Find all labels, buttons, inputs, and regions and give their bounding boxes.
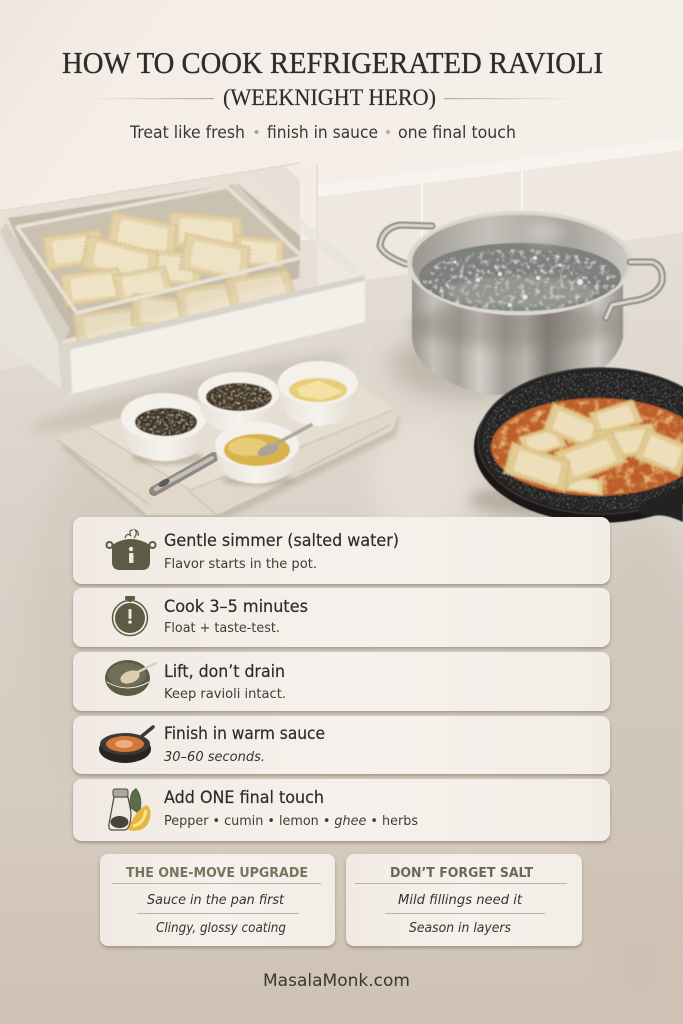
- step 1 text: Gentle simmer (salted water): [164, 531, 399, 550]
- tagline: finish in sauce: [267, 123, 378, 143]
- step 3 card: lift, don't drain: Keep ravioli intact.: [164, 686, 286, 702]
- spoon handle on napkin: [154, 457, 214, 491]
- step 2 text: Cook 3–5 minutes: [164, 597, 308, 616]
- footer: site name: MasalaMonk.com: [263, 971, 410, 991]
- step 4 card: finish in warm sauce: [73, 716, 610, 774]
- icon: stopwatch: [112, 596, 148, 636]
- upper cabinet: [0, 163, 318, 370]
- step 4 text: Finish in warm sauce: [164, 724, 325, 743]
- background: wall: [0, 0, 683, 300]
- step 3 card: lift, don't drain: [73, 652, 610, 711]
- skillet handle: [638, 486, 683, 522]
- tip panel: the one-move upgrade: Sauce in the pan first: [147, 892, 285, 908]
- tip panel: don't forget salt: Mild fillings need it: [398, 892, 523, 908]
- tomato sauce: [491, 398, 683, 496]
- ravioli in skillet: [502, 399, 683, 497]
- step 5 card: final touch: [73, 779, 610, 841]
- step 4 card: finish in warm sauce: 30–60 seconds.: [164, 749, 265, 765]
- ramekin: ghee with spoon: [215, 422, 311, 486]
- icon: skillet with sauce: [99, 727, 153, 763]
- background: marble counter: [0, 232, 683, 1024]
- icon: pot with steam: [106, 530, 156, 570]
- tip panel: don't forget salt: [346, 854, 582, 946]
- folded linen napkin: [57, 385, 400, 522]
- step 5 text: Add ONE final touch: [164, 788, 324, 807]
- step 3 text: Lift, don’t drain: [164, 662, 285, 681]
- ramekin: cracked pepper: [121, 393, 207, 465]
- tagline: one final touch: [398, 123, 516, 143]
- tip panel: the one-move upgrade: Clingy, glossy coating: [156, 920, 286, 936]
- ramekin: butter: [278, 361, 358, 426]
- subtitle with flanking rules: (WEEKNIGHT HERO): [223, 85, 436, 110]
- step 2 card: cook time: [73, 588, 610, 647]
- title: HOW TO COOK REFRIGERATED RAVIOLI: [62, 45, 603, 80]
- tip panel: the one-move upgrade: [100, 854, 335, 946]
- skillet with ravioli in sauce: [470, 368, 683, 523]
- tip panel: don't forget salt: DON’T FORGET SALT: [390, 865, 534, 881]
- tagline: [129, 123, 516, 143]
- refrigerator drawer with ravioli: [0, 176, 365, 441]
- step 5 card: final touch: Pepper • cumin • lemon • ghee • herbs: [164, 813, 418, 829]
- pot left handle: [380, 225, 432, 264]
- icon: bowl and spoon: [105, 660, 156, 696]
- background: tiled backsplash: [318, 138, 683, 290]
- step 1 card: gentle simmer: Flavor starts in the pot.: [164, 556, 317, 572]
- tagline: Treat like fresh: [129, 123, 245, 143]
- step 2 card: cook time: Float + taste-test.: [164, 620, 280, 636]
- tip panel: the one-move upgrade: THE ONE-MOVE UPGRADE: [126, 865, 308, 881]
- icon: pepper shaker, herbs and lemon: [109, 788, 150, 831]
- food container of ravioli: [17, 184, 304, 344]
- boiling water: [419, 243, 621, 311]
- tip panel: don't forget salt: Season in layers: [409, 920, 511, 936]
- ramekin: cumin: [198, 372, 280, 433]
- pot of boiling water: [380, 211, 662, 399]
- pot right handle: [606, 262, 662, 318]
- step 1 card: gentle simmer: [73, 517, 610, 584]
